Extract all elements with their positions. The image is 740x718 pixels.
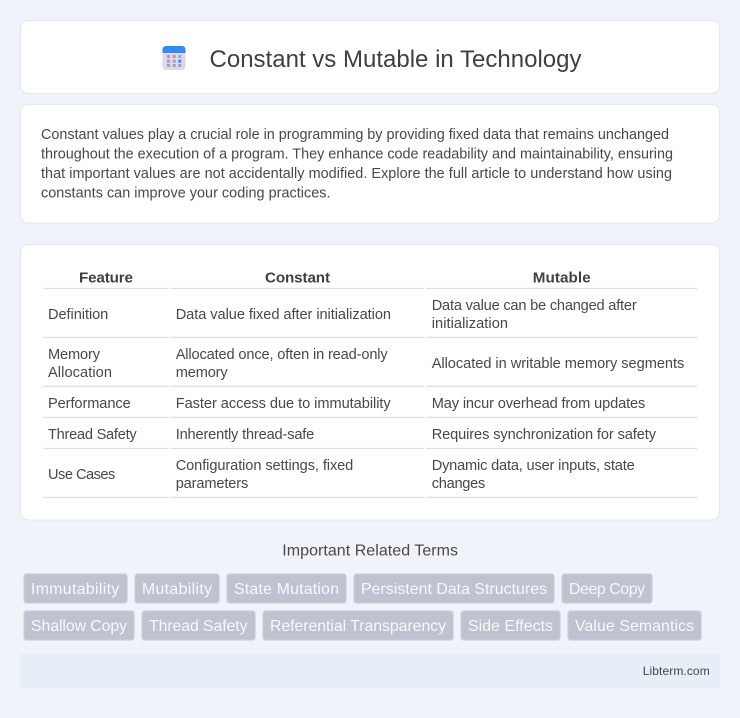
tag <box>24 574 127 603</box>
row: memory allocation: Allocated in writable memory segments <box>432 356 684 372</box>
panel: introduction <box>20 104 720 223</box>
row: performance: May incur overhead from updates <box>432 396 645 412</box>
tag: Value Semantics <box>575 618 694 635</box>
tag: Shallow Copy <box>31 618 127 635</box>
table header row: Constant <box>265 270 330 287</box>
tag <box>461 611 560 640</box>
tag <box>562 574 652 603</box>
row: use cases <box>48 458 635 492</box>
tag: Referential Transparency <box>270 618 446 635</box>
row: thread safety <box>48 427 657 443</box>
row: thread safety: Inherently thread-safe <box>176 427 314 443</box>
icon: calendar <box>162 46 186 70</box>
tag <box>24 611 134 640</box>
row: thread safety: Requires synchronization for safety <box>432 427 657 443</box>
row: memory allocation: Allocation <box>48 365 112 381</box>
tag <box>568 611 701 640</box>
heading: important related terms: Important Related Terms <box>282 543 458 560</box>
intro text: constants can improve your coding practices. <box>41 185 330 201</box>
tag: Thread Safety <box>149 618 248 635</box>
row: memory allocation: Allocated once, often in read-only <box>176 347 388 363</box>
tag: Immutability <box>31 581 119 598</box>
row: use cases: Use Cases <box>48 467 115 483</box>
row: use cases: parameters <box>176 476 248 492</box>
tag <box>263 611 453 640</box>
table header row: Feature <box>79 270 133 287</box>
tag: State Mutation <box>234 581 339 598</box>
row: definition: Definition <box>48 307 108 323</box>
footer <box>20 654 720 688</box>
intro text: that important values are not accidentally modified. Explore the full article to understand how using <box>41 166 672 182</box>
row: use cases: changes <box>432 476 485 492</box>
intro text <box>41 127 673 201</box>
row: memory allocation <box>48 347 684 381</box>
tag: Mutability <box>142 581 212 598</box>
footer credit: Libterm.com <box>643 664 710 678</box>
tag <box>142 611 255 640</box>
tag <box>354 574 554 603</box>
row: use cases: Configuration settings, fixed <box>176 458 353 474</box>
row: definition: Data value fixed after initialization <box>176 307 391 323</box>
row: definition: Data value can be changed after <box>432 298 637 314</box>
tag: Persistent Data Structures <box>361 581 547 598</box>
tag <box>135 574 219 603</box>
row: use cases: Dynamic data, user inputs, state <box>432 458 635 474</box>
row: memory allocation: memory <box>176 365 228 381</box>
row: definition: initialization <box>432 316 508 332</box>
title: Constant vs Mutable in Technology <box>210 46 582 73</box>
row: performance: Performance <box>48 396 131 412</box>
panel: header <box>20 20 720 94</box>
tag <box>227 574 346 603</box>
row: performance <box>48 396 645 412</box>
tag: Side Effects <box>468 618 553 635</box>
intro text: Constant values play a crucial role in programming by providing fixed data that remains unchanged <box>41 127 669 143</box>
row: thread safety: Thread Safety <box>48 427 137 443</box>
tags: related terms <box>24 574 701 640</box>
panel: comparison table <box>20 244 720 520</box>
row: memory allocation: Memory <box>48 347 101 363</box>
tag: Deep Copy <box>569 581 645 598</box>
row: definition <box>48 298 637 332</box>
intro text: throughout the execution of a program. They enhance code readability and maintainability, ensuring <box>41 146 673 162</box>
table header row <box>79 270 591 287</box>
row: performance: Faster access due to immutability <box>176 396 391 412</box>
table header row: Mutable <box>533 270 591 287</box>
